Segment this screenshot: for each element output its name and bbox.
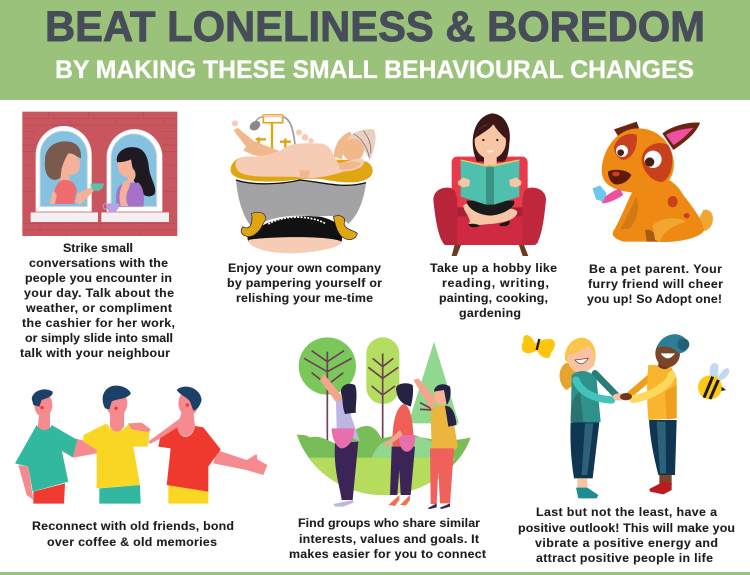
text: be a pet parent: Be a pet parent. Your bbox=[589, 262, 722, 276]
text: positive outlook: attract positive people in life bbox=[536, 551, 713, 565]
text: be a pet parent: furry friend will cheer bbox=[588, 277, 723, 291]
illustration: woman in bathtub bbox=[231, 115, 376, 253]
bottom green strip bbox=[0, 572, 750, 575]
illustration: puppy with butterfly bbox=[593, 122, 713, 242]
text: strike small conversations: people you encounter in bbox=[25, 271, 172, 285]
text: strike small conversations: conversations with the bbox=[29, 256, 168, 270]
text: reconnect with old friends bbox=[32, 519, 234, 549]
text: be a pet parent: you up! So Adopt one! bbox=[587, 292, 722, 306]
text: enjoy your own company: relishing your me-time bbox=[236, 291, 373, 305]
header banner bbox=[0, 0, 750, 100]
text: positive outlook: Last but not the least, have a bbox=[536, 505, 717, 519]
text: positive outlook bbox=[518, 505, 735, 565]
illustration: two women chatting at windows bbox=[22, 112, 177, 236]
text: enjoy your own company bbox=[227, 261, 382, 305]
illustration: two women holding hands with butterfly and bee bbox=[522, 334, 729, 498]
text: strike small conversations: Strike small bbox=[63, 241, 133, 255]
text: positive outlook: vibrate a positive energy and bbox=[535, 536, 718, 550]
text: strike small conversations: your day. Talk about the bbox=[24, 286, 174, 300]
text: be a pet parent bbox=[587, 262, 723, 306]
illustration: woman reading in armchair bbox=[433, 113, 546, 256]
title: BEAT LONELINESS & BOREDOM bbox=[45, 3, 705, 51]
text: strike small conversations: the cashier for her work, bbox=[22, 316, 175, 330]
text: enjoy your own company: by pampering yourself or bbox=[227, 276, 382, 290]
text: take up a hobby: reading, writing, bbox=[442, 276, 549, 290]
illustration: group of people in park bbox=[297, 337, 471, 509]
text: find groups: interests, values and goals. It bbox=[299, 532, 479, 546]
text: strike small conversations: talk with your neighbour bbox=[20, 346, 170, 360]
text: take up a hobby bbox=[430, 261, 557, 320]
text: take up a hobby: gardening bbox=[459, 306, 521, 320]
text: strike small conversations: weather, or compliment bbox=[25, 301, 172, 315]
text: find groups: Find groups who share similar bbox=[298, 516, 480, 530]
text: strike small conversations: or simply slide into small bbox=[25, 331, 173, 345]
text: strike small conversations bbox=[20, 241, 175, 360]
text: find groups: makes easier for you to connect bbox=[289, 547, 486, 561]
text: enjoy your own company: Enjoy your own company bbox=[228, 261, 381, 275]
text: find groups bbox=[289, 516, 486, 561]
illustration: three friends bbox=[15, 386, 267, 504]
text: take up a hobby: Take up a hobby like bbox=[430, 261, 557, 275]
text: take up a hobby: painting, cooking, bbox=[439, 291, 548, 305]
text: positive outlook: positive outlook! This will make you bbox=[518, 521, 735, 535]
text: reconnect with old friends: over coffee & old memories bbox=[47, 535, 217, 549]
subtitle: BY MAKING THESE SMALL BEHAVIOURAL CHANGES bbox=[55, 56, 694, 84]
text: reconnect with old friends: Reconnect with old friends, bond bbox=[32, 519, 234, 533]
